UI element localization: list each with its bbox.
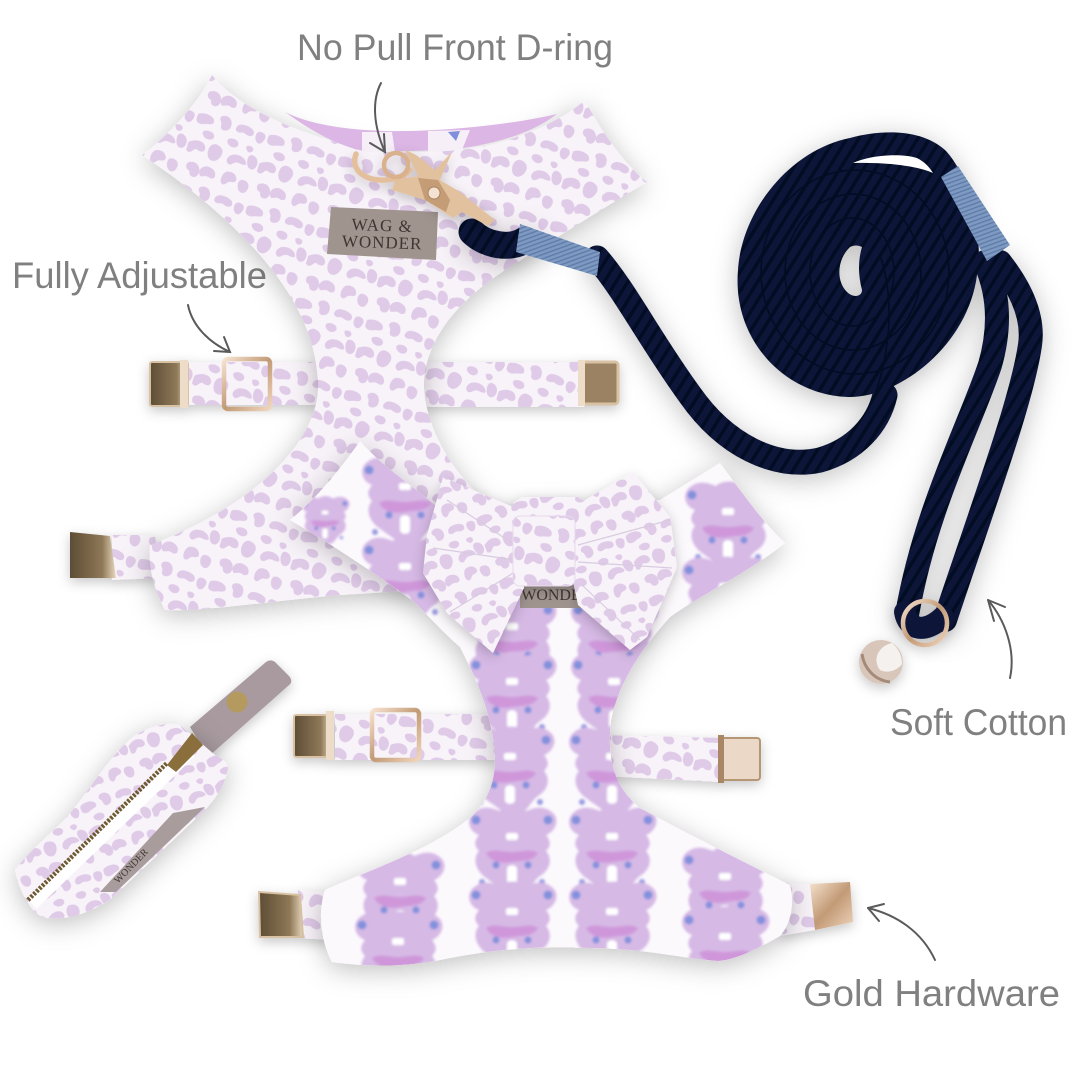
rope leash <box>472 132 1031 620</box>
zipper teeth <box>28 763 167 900</box>
harness body <box>290 441 792 966</box>
leash ring and charm <box>859 601 947 684</box>
harness straps and buckles <box>70 360 618 580</box>
clip hardware: front D-ring <box>355 150 495 226</box>
label: Gold Hardware: Gold Hardware <box>803 973 1060 1014</box>
pouch label: WONDER <box>112 847 151 886</box>
brand label: WAG & <box>351 215 413 236</box>
harness straps and buckles <box>259 711 853 940</box>
brand label <box>327 207 438 260</box>
snap rivet <box>226 692 248 712</box>
rorschach print columns <box>301 456 772 999</box>
ring <box>903 601 947 645</box>
harness body with leopard print <box>142 75 647 610</box>
lining at neck <box>285 112 557 152</box>
bow <box>423 472 677 653</box>
leash lead from clip to coil <box>472 232 885 462</box>
zipper pull <box>167 733 203 772</box>
brand label under bow: WONDE <box>521 587 581 604</box>
pouch body <box>15 724 228 918</box>
arrow to D-ring <box>370 83 385 152</box>
arrow to slider <box>188 305 230 352</box>
brand label: WONDER <box>342 232 423 253</box>
leather strap <box>190 660 291 757</box>
leopard harness <box>70 75 647 610</box>
leash handle strands <box>907 262 1031 620</box>
pouch label <box>100 807 205 892</box>
charm <box>859 640 903 684</box>
leash blue wrap near clip <box>516 224 600 276</box>
arrow to gold buckle <box>868 904 935 960</box>
arrow to rope <box>988 600 1012 678</box>
coiled rope <box>738 132 979 397</box>
rope end through ring <box>905 612 943 628</box>
adjuster slider <box>224 359 270 409</box>
label: No Pull Front D-ring: No Pull Front D-ring <box>297 27 613 68</box>
brand label under bow <box>520 583 582 608</box>
white zipper tape <box>32 752 190 904</box>
leash blue wrap at handle <box>941 166 1010 261</box>
gap under top strand of coil <box>853 155 933 173</box>
label: Fully Adjustable: Fully Adjustable <box>12 255 267 296</box>
label: Soft Cotton: Soft Cotton <box>890 702 1067 743</box>
lilac rorschach harness <box>259 441 853 999</box>
poop bag pouch <box>15 660 291 918</box>
adjuster slider <box>372 710 419 760</box>
